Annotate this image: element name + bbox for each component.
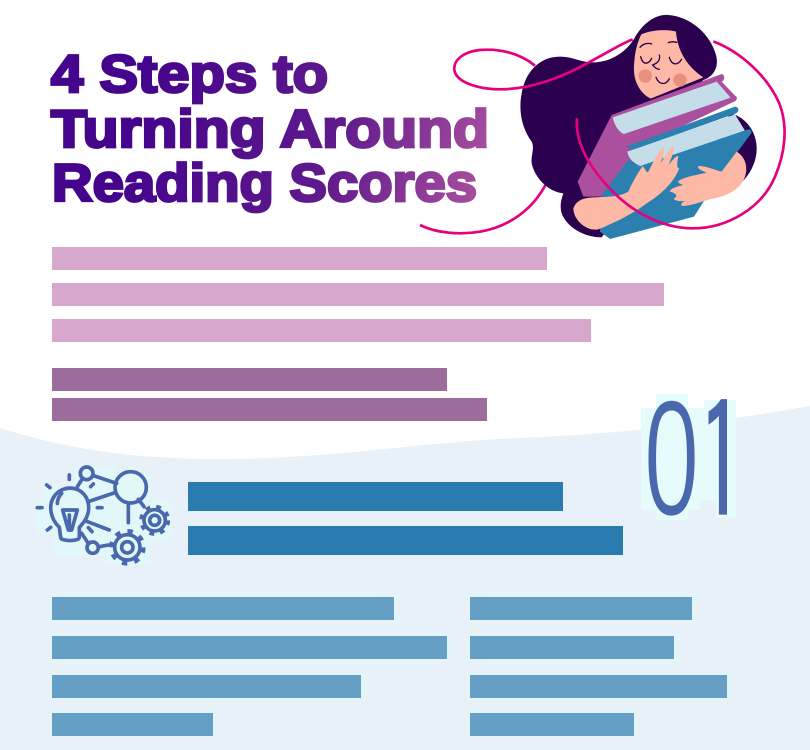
magenta line behind figure: [420, 184, 546, 233]
bulb: [51, 488, 89, 541]
number halo: [641, 394, 736, 520]
number text: 0: [644, 366, 699, 550]
back hair right: [707, 113, 757, 198]
title: 4 Steps to: [51, 45, 328, 104]
text bar halos: [49, 594, 733, 739]
right column text bars: [470, 597, 727, 736]
top book pages: [613, 82, 731, 134]
step number 01: [641, 366, 746, 550]
title: Reading Scores: [52, 154, 477, 213]
cheeks: [639, 69, 652, 83]
facial features: [640, 42, 682, 84]
rays: [37, 475, 102, 532]
pink text bars: [52, 247, 664, 342]
small gear: [150, 515, 160, 525]
icon halo: [37, 467, 172, 565]
left arm and hand: [573, 147, 679, 230]
left column text bars: [52, 597, 447, 736]
face: [634, 30, 703, 99]
hair: [520, 15, 717, 237]
magenta line over figure: [454, 39, 633, 89]
purple book cover: [578, 74, 737, 197]
blue book cover: [600, 129, 752, 239]
blue book spine strip: [626, 107, 738, 150]
large gear: [122, 542, 133, 553]
title: [51, 45, 489, 213]
purple text bars: [52, 368, 487, 421]
right arm and hand: [670, 152, 746, 206]
dark blue heading bars: [188, 482, 623, 555]
number text: 1: [697, 379, 746, 544]
network lines: [77, 475, 144, 547]
pale blue wave background: [0, 406, 810, 750]
illustration: woman hugging books: [420, 15, 785, 239]
nodes: [80, 467, 93, 480]
title: Turning Around: [51, 100, 489, 159]
lower book pages: [627, 114, 745, 166]
icon: lightbulb, network and gears: [37, 467, 172, 565]
